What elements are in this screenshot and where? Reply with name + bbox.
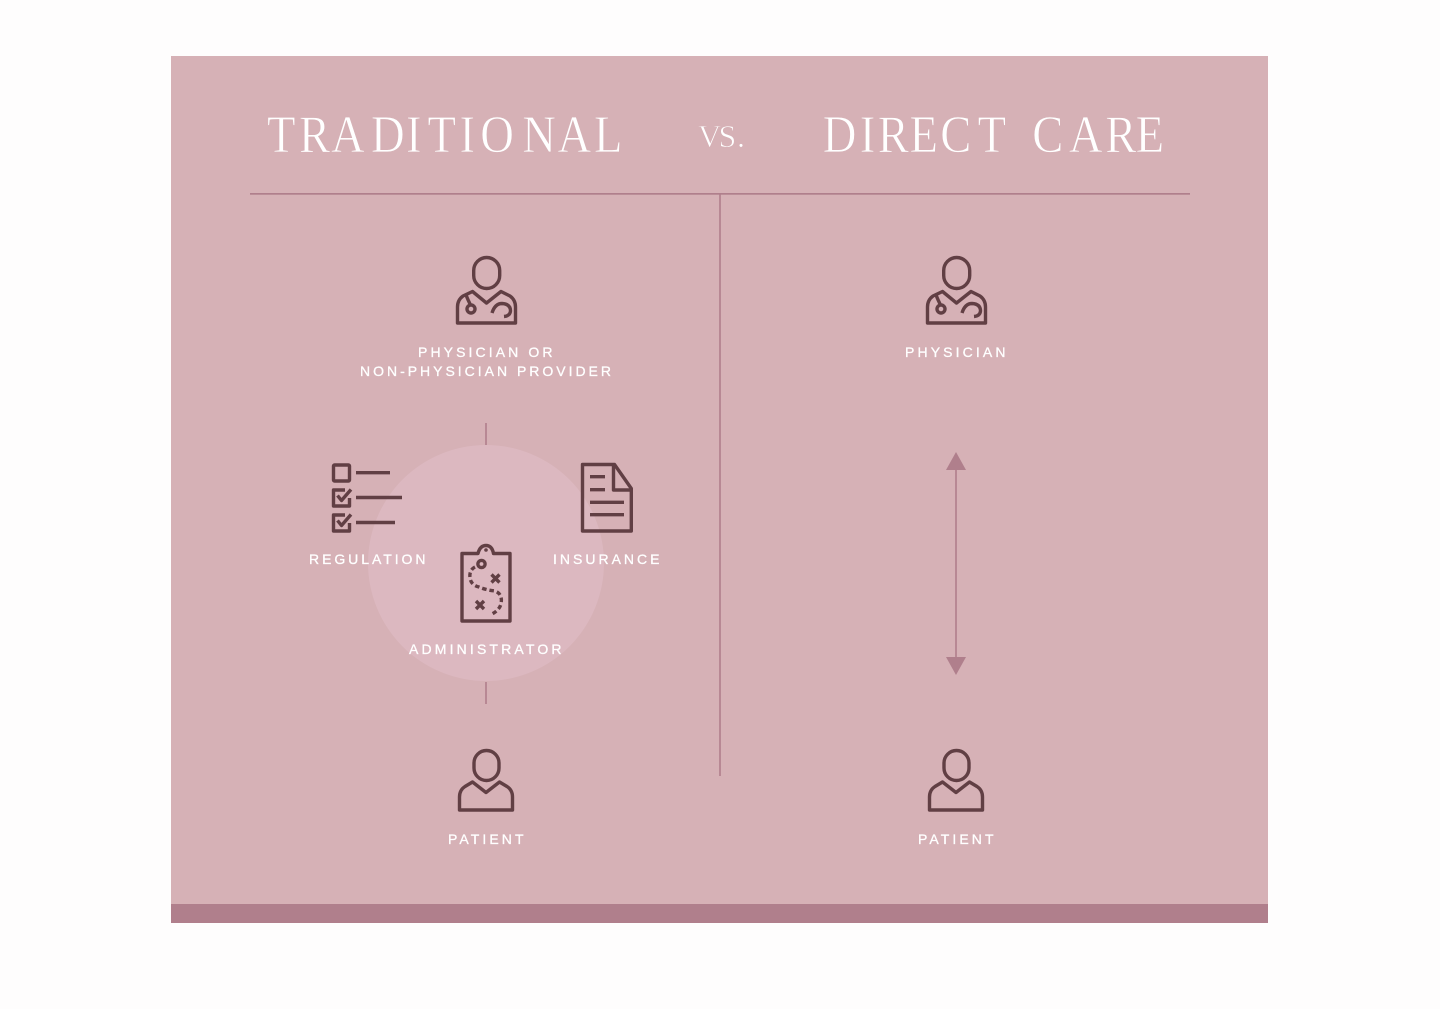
- label: physician or non-physician provider: NON-PHYSICIAN PROVIDER: [360, 363, 611, 379]
- icon: physician: [928, 258, 986, 323]
- connector: bottom tick: [485, 682, 487, 704]
- icon: patient: [460, 750, 512, 810]
- arrow: two-way between physician and patient: [946, 452, 966, 675]
- icon: regulation checklist: [334, 465, 402, 531]
- label: physician or non-physician provider: [360, 344, 611, 379]
- icon: patient: [930, 750, 982, 810]
- column divider: [719, 194, 721, 776]
- panel: traditional care: [309, 258, 660, 847]
- title: vs.: VS.: [698, 118, 745, 154]
- icon: administrator clipboard map: [462, 546, 510, 621]
- connector: top tick: [485, 423, 487, 445]
- title: direct care: DIRECTCARE: [823, 105, 1164, 164]
- icon: insurance document: [582, 464, 632, 531]
- footer bar: [171, 904, 1268, 923]
- label: physician: PHYSICIAN: [905, 344, 1006, 360]
- header divider: [250, 193, 1190, 195]
- highlight circle: [368, 445, 604, 681]
- panel: background: [171, 56, 1268, 923]
- label: regulation: REGULATION: [309, 551, 426, 567]
- label: administrator: ADMINISTRATOR: [409, 641, 562, 657]
- icon: physician: [458, 258, 516, 323]
- panel: direct care: [905, 258, 1006, 847]
- label: insurance: INSURANCE: [553, 551, 660, 567]
- label: patient: PATIENT: [918, 831, 994, 847]
- label: physician or non-physician provider: PHYSICIAN OR: [418, 344, 552, 360]
- title: traditional: TRADITIONAL: [267, 105, 622, 164]
- label: patient: PATIENT: [448, 831, 524, 847]
